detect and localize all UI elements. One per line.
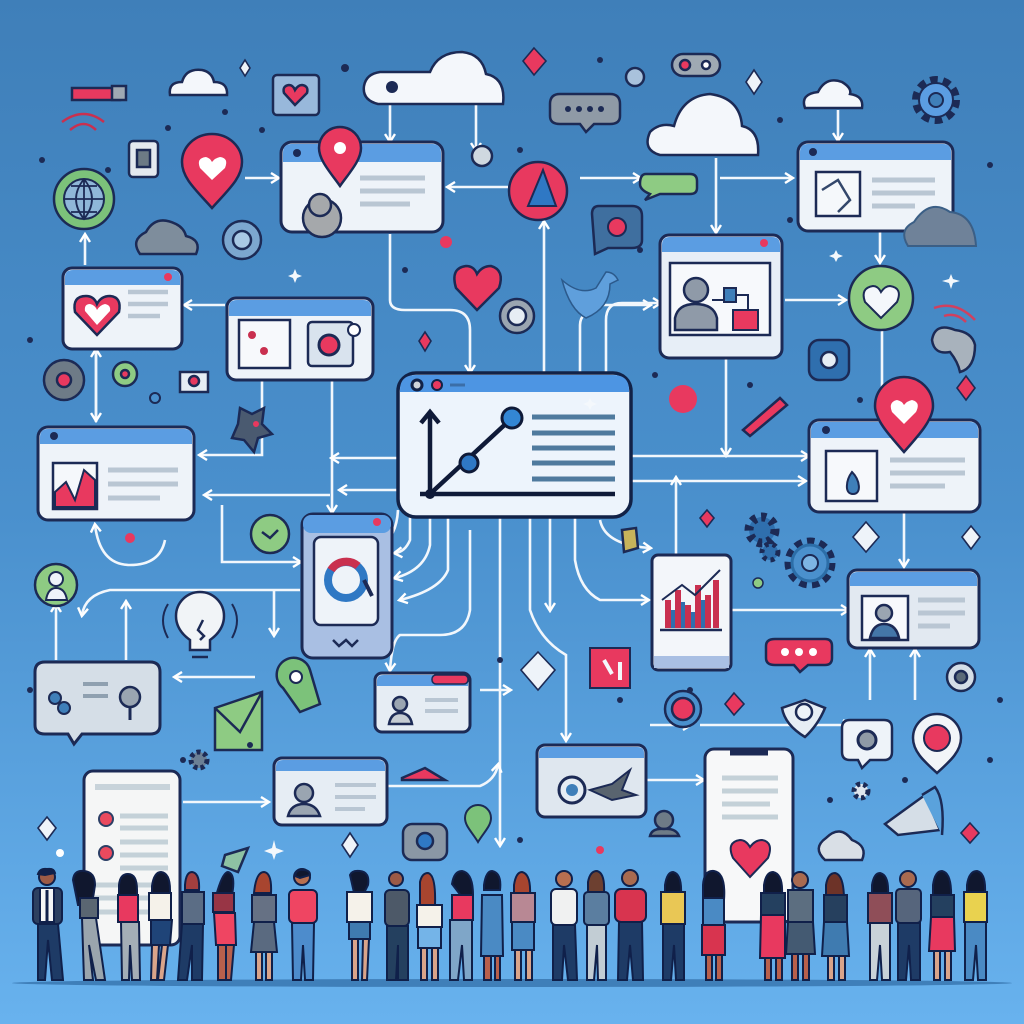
icon: lightbulb	[163, 592, 237, 657]
person 16	[584, 871, 609, 980]
dots	[27, 57, 1003, 857]
person 7	[251, 872, 277, 980]
window: right map card	[809, 420, 980, 512]
crowd of people	[33, 869, 987, 980]
person 9	[347, 871, 372, 980]
person 14	[511, 872, 535, 980]
person 21	[786, 872, 815, 980]
phone: bar chart	[652, 555, 731, 670]
person 5	[178, 872, 204, 980]
window: small profile card	[375, 673, 470, 732]
person 3	[118, 874, 140, 980]
window: person with chart	[660, 235, 782, 358]
icon: twitter bird	[562, 272, 618, 318]
icon: red triangle circle	[509, 162, 567, 220]
phone: right heart	[705, 749, 793, 922]
window: line chart card	[38, 427, 194, 520]
person 18	[661, 872, 685, 980]
window: right profile card	[848, 570, 979, 648]
person 19	[702, 871, 725, 980]
person 12	[450, 871, 473, 980]
window: lower profile card	[274, 758, 387, 825]
person 4	[149, 872, 172, 980]
person 26	[964, 871, 987, 980]
clouds	[136, 52, 976, 860]
person 2	[73, 871, 105, 980]
connector lines	[56, 105, 915, 845]
person 6	[213, 872, 236, 980]
icon: diamonds and sparkles	[38, 48, 980, 860]
phone: donut chart	[302, 514, 392, 658]
phone: left article	[84, 771, 180, 945]
person 15	[551, 871, 577, 980]
window: dual image card	[227, 298, 373, 380]
window: top right card	[798, 142, 953, 231]
ground line	[12, 979, 1012, 987]
window: heart card	[63, 268, 182, 349]
speech bubble: chat card	[35, 662, 160, 744]
person 17	[615, 870, 646, 980]
person 1	[33, 869, 63, 980]
person 25	[929, 871, 955, 980]
person 11	[417, 873, 442, 980]
person 24	[896, 871, 921, 980]
icon: green clock	[251, 515, 289, 553]
person 23	[868, 873, 892, 980]
icon: speech bubbles	[550, 94, 892, 768]
icon: globe	[54, 169, 114, 229]
window: top profile card	[281, 142, 443, 237]
icon: green person circle	[35, 564, 77, 606]
window: central chart	[398, 373, 631, 517]
icon: green heart circle	[849, 266, 913, 330]
icon: small badges and rings	[44, 54, 975, 872]
person 22	[822, 873, 849, 980]
person 20	[760, 872, 785, 980]
person 10	[385, 872, 409, 980]
person 8	[289, 869, 317, 980]
person 13	[481, 871, 503, 980]
icon: location pins and hearts	[182, 127, 961, 842]
window: gears card	[537, 745, 646, 817]
icon: gears	[191, 81, 955, 798]
